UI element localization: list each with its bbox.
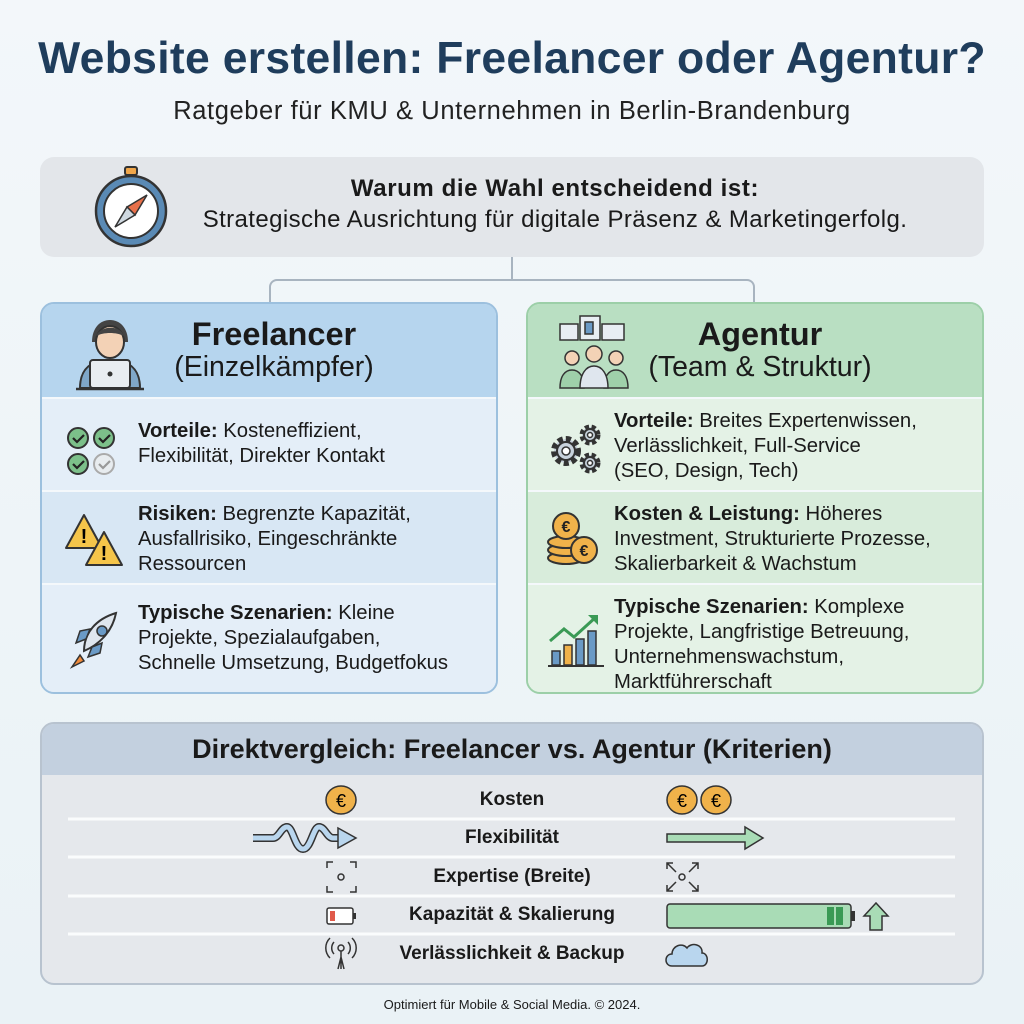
heading vergleich: Direktvergleich: Freelancer vs. Agentur (Kriterien) bbox=[192, 734, 832, 764]
text szenarien: Schnelle Umsetzung, Budgetfokus bbox=[138, 652, 448, 674]
icon: antenna bbox=[326, 938, 356, 969]
label: verlaesslichkeit: Verlässlichkeit & Backup bbox=[400, 943, 624, 964]
text risiken: Risiken: Begrenzte Kapazität, bbox=[138, 503, 411, 525]
panel: freelancer bbox=[40, 302, 498, 694]
heading freelancer bbox=[174, 316, 374, 383]
label: flexibilitaet: Flexibilität bbox=[465, 827, 559, 848]
icon: coins: € bbox=[562, 519, 571, 536]
icon: warnings bbox=[65, 514, 123, 566]
icon: person laptop bbox=[76, 320, 144, 390]
icon: checks bbox=[67, 427, 115, 475]
text szenarien agentur: Typische Szenarien: Komplexe bbox=[614, 596, 904, 618]
icon: team bbox=[559, 315, 629, 389]
icon: coins agentur: € bbox=[677, 791, 687, 811]
icon: coins bbox=[547, 512, 598, 565]
label: kosten: Kosten bbox=[480, 789, 544, 810]
intro box bbox=[40, 157, 984, 257]
icon: coins agentur bbox=[667, 786, 731, 814]
row: szenarien agentur bbox=[528, 583, 982, 696]
text kosten: Skalierbarkeit & Wachstum bbox=[614, 553, 857, 575]
heading agentur: (Team & Struktur) bbox=[648, 351, 872, 383]
subtitle: Ratgeber für KMU & Unternehmen in Berlin-Brandenburg bbox=[173, 97, 851, 125]
text szenarien agentur: Projekte, Langfristige Betreuung, bbox=[614, 621, 909, 643]
panel: agentur bbox=[526, 302, 984, 694]
icon: straight arrow bbox=[667, 827, 763, 849]
label: kapazitaet: Kapazität & Skalierung bbox=[409, 904, 615, 925]
icon: low battery bbox=[327, 908, 356, 924]
icon: coins agentur: € bbox=[711, 791, 721, 811]
text risiken bbox=[138, 503, 411, 575]
icon: coins: € bbox=[580, 543, 589, 560]
header agentur bbox=[528, 304, 984, 397]
icon: wavy arrow bbox=[253, 827, 356, 849]
heading agentur bbox=[648, 316, 872, 383]
connector lines bbox=[269, 257, 755, 302]
panel: direktvergleich bbox=[40, 722, 984, 985]
text risiken: Ressourcen bbox=[138, 553, 246, 575]
text kosten bbox=[614, 503, 931, 575]
text kosten: Investment, Strukturierte Prozesse, bbox=[614, 528, 931, 550]
heading freelancer: (Einzelkämpfer) bbox=[174, 351, 374, 383]
row: vorteile bbox=[42, 397, 496, 490]
row: kosten agentur bbox=[528, 490, 982, 583]
row: szenarien bbox=[42, 583, 496, 696]
icon: coin freelancer: € bbox=[336, 791, 346, 811]
icon: gears bbox=[551, 424, 600, 474]
text vorteile agentur: Vorteile: Breites Expertenwissen, bbox=[614, 410, 917, 432]
text vorteile: Vorteile: Kosteneffizient, bbox=[138, 420, 362, 442]
icon: focus wide bbox=[667, 863, 698, 891]
icon: full battery bbox=[667, 903, 888, 930]
heading freelancer: Freelancer bbox=[192, 316, 356, 352]
icon: warnings: ! bbox=[81, 526, 87, 548]
text szenarien: Projekte, Spezialaufgaben, bbox=[138, 627, 380, 649]
intro text: Warum die Wahl entscheidend ist: bbox=[351, 175, 759, 202]
text vorteile: Flexibilität, Direkter Kontakt bbox=[138, 445, 385, 467]
icon: growth chart bbox=[548, 615, 604, 667]
row: risiken bbox=[42, 490, 496, 583]
icon: coin freelancer bbox=[326, 786, 356, 814]
text vorteile agentur: Verlässlichkeit, Full-Service bbox=[614, 435, 861, 457]
header freelancer bbox=[42, 304, 498, 397]
title: Website erstellen: Freelancer oder Agentur? bbox=[38, 34, 986, 83]
text kosten: Kosten & Leistung: Höheres bbox=[614, 503, 882, 525]
footer: Optimiert für Mobile & Social Media. © 2024. bbox=[384, 997, 640, 1012]
text vorteile agentur bbox=[614, 410, 917, 482]
icon: compass bbox=[94, 166, 168, 248]
heading vergleich bbox=[42, 724, 982, 775]
text vorteile bbox=[138, 420, 385, 467]
text vorteile agentur: (SEO, Design, Tech) bbox=[614, 460, 798, 482]
icon: rocket bbox=[70, 612, 118, 669]
intro text bbox=[203, 175, 907, 233]
text szenarien bbox=[138, 602, 448, 674]
text szenarien agentur: Unternehmenswachstum, bbox=[614, 646, 844, 668]
text szenarien: Typische Szenarien: Kleine bbox=[138, 602, 395, 624]
text risiken: Ausfallrisiko, Eingeschränkte bbox=[138, 528, 397, 550]
label: expertise: Expertise (Breite) bbox=[433, 866, 591, 887]
text szenarien agentur: Marktführerschaft bbox=[614, 671, 772, 693]
icon: focus narrow bbox=[327, 862, 356, 892]
icon: warnings: ! bbox=[101, 543, 107, 565]
heading agentur: Agentur bbox=[698, 316, 822, 352]
text szenarien agentur bbox=[614, 596, 909, 693]
intro text: Strategische Ausrichtung für digitale Präsenz & Marketingerfolg. bbox=[203, 206, 907, 233]
icon: cloud bbox=[666, 945, 707, 966]
row: vorteile agentur bbox=[528, 397, 982, 490]
